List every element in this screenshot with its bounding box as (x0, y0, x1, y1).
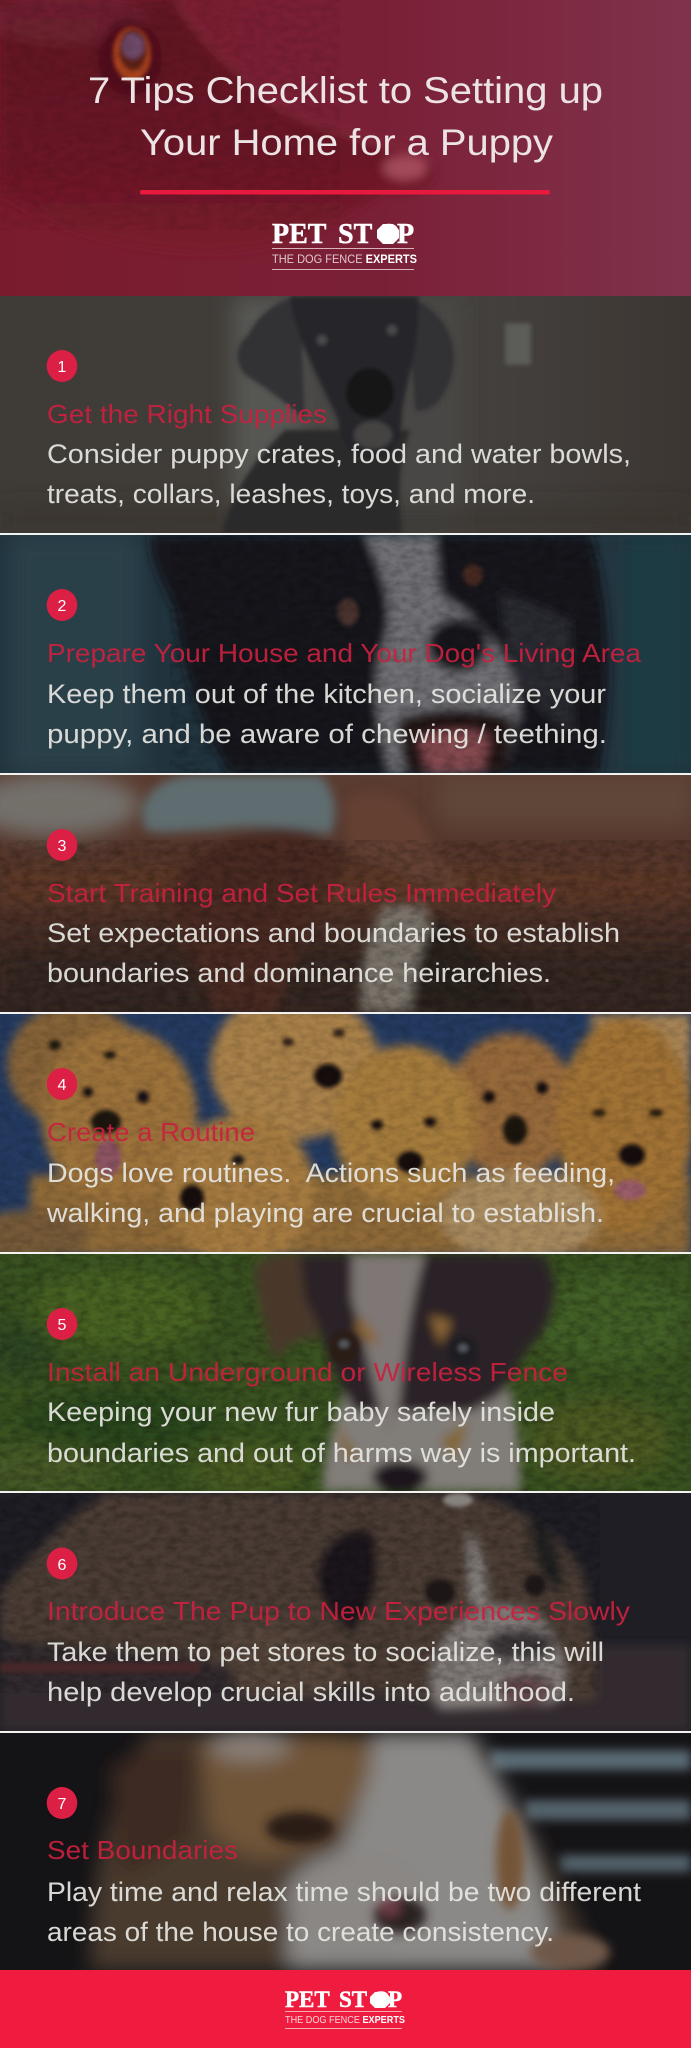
panel: tip 7 (0, 1729, 691, 1970)
photo: brindle bulldog lying down (0, 1493, 691, 1731)
body text: puppy, and be aware of chewing / teething. (47, 719, 607, 749)
number badge 5: 5 (58, 1317, 67, 1334)
photo: girl bending over dog in field (0, 773, 691, 1012)
panel: tip 5 (0, 1254, 691, 1495)
heading: Start Training and Set Rules Immediately (47, 878, 556, 908)
number badge 6: 6 (58, 1557, 67, 1574)
number badge 4 (47, 1068, 77, 1100)
number badge 1: 1 (58, 359, 67, 376)
body text: Keeping your new fur baby safely inside (47, 1397, 555, 1427)
heading: Set Boundaries (47, 1835, 238, 1865)
photo: black great dane (0, 296, 691, 533)
title: 7 Tips Checklist to Setting up (88, 70, 603, 111)
icon: dog eye (113, 27, 151, 81)
number badge 1 (47, 350, 77, 382)
body text (47, 679, 607, 749)
logo: Pet Stop footer: ST (339, 1987, 367, 2012)
number badge 7 (47, 1787, 77, 1819)
panel: tip 1 (0, 296, 691, 533)
fur texture (170, 535, 600, 773)
field texture (0, 840, 691, 1012)
heading: Install an Underground or Wireless Fence (47, 1357, 568, 1387)
body text: Take them to pet stores to socialize, this will (47, 1637, 604, 1667)
photo: golden retriever puppies (0, 1014, 691, 1252)
header fur texture (0, 0, 340, 230)
heading: Prepare Your House and Your Dog's Living Area (47, 638, 642, 668)
logo: Pet Stop (272, 219, 417, 270)
logo: Pet Stop footer: THE DOG FENCE EXPERTS (285, 2015, 405, 2026)
photo: border collie (0, 535, 691, 773)
logo: Pet Stop footer: O (372, 1987, 390, 2012)
title underline (140, 190, 550, 194)
body text: treats, collars, leashes, toys, and more. (47, 479, 535, 509)
logo: Pet Stop footer: P (388, 1987, 402, 2012)
body text: Keep them out of the kitchen, socialize your (47, 679, 606, 709)
logo: Pet Stop: O (378, 219, 400, 250)
body text (47, 439, 631, 509)
body text: Play time and relax time should be two different (47, 1877, 642, 1907)
footer band (0, 1970, 691, 2048)
logo: Pet Stop: PET (272, 219, 327, 250)
body text (46, 1158, 615, 1228)
logo: Pet Stop footer (285, 1987, 405, 2029)
number badge 3: 3 (58, 838, 67, 855)
logo: Pet Stop: ST (338, 219, 373, 250)
panel: tip 2 (0, 535, 691, 773)
number badge 2 (47, 589, 77, 621)
body text: areas of the house to create consistency. (47, 1917, 554, 1947)
brindle texture (0, 1493, 600, 1693)
number badge 7: 7 (58, 1796, 67, 1813)
logo: Pet Stop footer: PET (285, 1987, 330, 2012)
logo: Pet Stop: THE DOG FENCE EXPERTS (272, 252, 417, 266)
body text: Consider puppy crates, food and water bowls, (47, 439, 631, 469)
panel: tip 3 (0, 773, 691, 1012)
photo: fluffy brown and white puppy (0, 1729, 691, 1970)
panel: tip 6 (0, 1493, 691, 1731)
body text: boundaries and out of harms way is important. (47, 1438, 636, 1468)
dog eyes (337, 564, 483, 626)
body text (47, 1877, 642, 1947)
body text (47, 1397, 636, 1468)
number badge 4: 4 (58, 1077, 67, 1094)
body text (47, 918, 620, 988)
panel: header (0, 0, 691, 296)
fur texture (0, 1014, 691, 1252)
body text: help develop crucial skills into adulthood. (47, 1677, 575, 1707)
heading: Introduce The Pup to New Experiences Slowly (47, 1596, 630, 1626)
number badge 6 (47, 1548, 77, 1580)
body text: boundaries and dominance heirarchies. (47, 958, 551, 988)
title: Your Home for a Puppy (140, 122, 554, 163)
number badge 5 (47, 1308, 77, 1340)
panel: footer (0, 1970, 691, 2048)
logo: Pet Stop: P (397, 219, 414, 250)
body text: Set expectations and boundaries to establish (47, 918, 620, 948)
header photo: dog in profile with red tint (0, 0, 691, 296)
title (88, 70, 603, 163)
body text: Dogs love routines. Actions such as feeding, (47, 1158, 615, 1188)
heading: Create a Routine (47, 1117, 255, 1147)
body text: walking, and playing are crucial to establish. (46, 1198, 604, 1228)
photo: tricolor dog in greenery (0, 1254, 691, 1495)
body text (47, 1637, 604, 1707)
number badge 3 (47, 829, 77, 861)
number badge 2: 2 (58, 598, 67, 615)
foliage texture (0, 1254, 691, 1491)
panel: tip 4 (0, 1014, 691, 1252)
heading: Get the Right Supplies (47, 399, 327, 429)
